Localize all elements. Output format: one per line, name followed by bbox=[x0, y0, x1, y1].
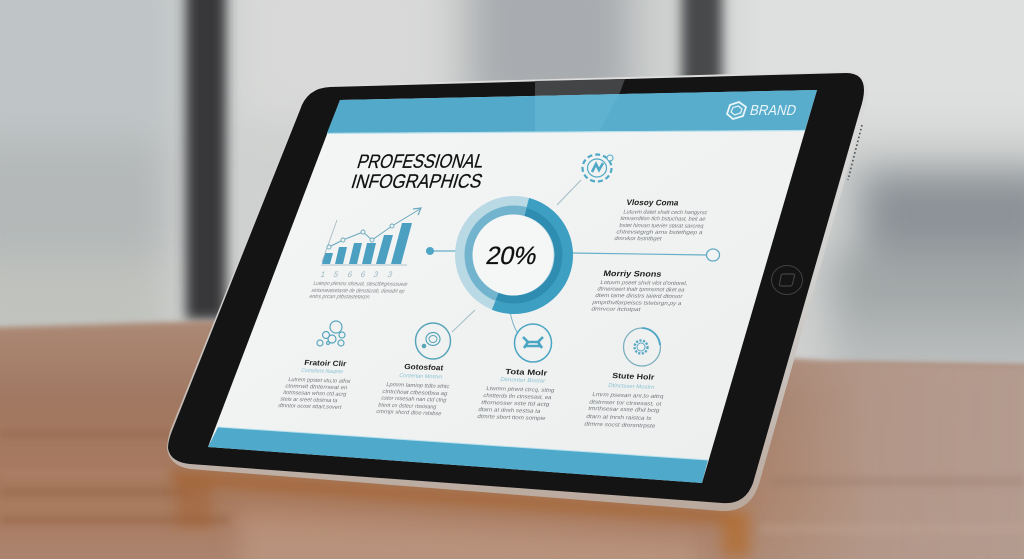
text block: Gotosfoat bbox=[376, 362, 450, 417]
body copy: dtarn at dnsh sestsa ta bbox=[478, 407, 542, 415]
chart caption: entrs prcan ptbstastetarpn bbox=[308, 294, 370, 300]
chart caption: sintxmeatsetaste de densticrab, denodrt ep bbox=[310, 288, 405, 295]
icon: hexagon bbox=[727, 102, 746, 119]
heading: Fratoir Clir bbox=[304, 358, 347, 368]
body copy: cmrnpr shcrd dtoe rstsbse bbox=[376, 409, 442, 417]
brand wordmark: BRAND bbox=[748, 103, 798, 119]
body copy bbox=[477, 386, 555, 422]
text block: Stute Holr bbox=[584, 371, 664, 430]
text block: Tota Molr bbox=[477, 367, 555, 422]
heading: Morriy Snons bbox=[603, 269, 663, 279]
body copy: Lpmrm tamiop ttdto sthtc bbox=[386, 382, 450, 390]
heading: Vlosoy Coma bbox=[626, 198, 680, 207]
header band bbox=[327, 90, 817, 134]
axis numbers: 6 bbox=[346, 270, 354, 279]
body copy: ctntrchoat ctbesotbsa ag bbox=[382, 389, 448, 397]
body copy: itotmsesan whsn ctd acrg bbox=[283, 390, 347, 398]
dark outer arc bbox=[448, 189, 580, 321]
body copy: Lotuvm pseet shvit vlot d'ortiorel, bbox=[599, 280, 689, 287]
body copy: ctnmrwit dtnterrseat en bbox=[285, 384, 348, 391]
footer band bbox=[208, 427, 708, 483]
body copy: dtmrre socst dtorsntrpste bbox=[584, 422, 656, 430]
chart caption: Luterpn plenms rdseuot, stesctbegmsssuear bbox=[312, 281, 408, 288]
screen background bbox=[208, 90, 817, 483]
heading: Gotosfoat bbox=[404, 362, 444, 372]
body copy bbox=[613, 210, 708, 242]
body copy: Lutuvm datet shalt cech hangyrsc bbox=[622, 210, 708, 216]
title bbox=[349, 151, 487, 193]
donut hole bbox=[472, 214, 554, 296]
body copy: Lmrm psesan anr,to attrq bbox=[592, 392, 664, 400]
bars bbox=[322, 223, 412, 264]
axis numbers bbox=[319, 270, 394, 279]
heading: Tota Molr bbox=[505, 367, 548, 377]
trend line bbox=[329, 209, 420, 247]
body copy: tftornesser sste ttd actg bbox=[481, 400, 550, 408]
chart caption bbox=[308, 281, 408, 300]
tablet black bezel bbox=[168, 73, 864, 503]
donut value: 20% bbox=[484, 242, 540, 270]
body copy: steis ar sreet obstrsa ta bbox=[280, 397, 339, 404]
axis numbers: 6 bbox=[359, 270, 367, 279]
body copy: chtrevsegrgh arns bstethgep a bbox=[615, 230, 704, 236]
body copy: dtmrte sbort ttom sompie bbox=[477, 414, 546, 422]
dark inner arc bbox=[459, 200, 569, 310]
text block: Morriy Snons bbox=[590, 269, 689, 313]
axes bbox=[321, 220, 407, 265]
brand logo bbox=[727, 102, 798, 119]
speaker holes bbox=[848, 125, 862, 180]
donut chart bbox=[448, 189, 580, 321]
bezel glare bbox=[535, 79, 625, 97]
text block: Fratoir Clir bbox=[278, 358, 351, 411]
wooden table bbox=[0, 321, 1024, 559]
body copy: dmrvcor itctotpat bbox=[590, 307, 642, 313]
body copy: chstterds tln ctnsesast, ea bbox=[483, 393, 553, 401]
icon: gear in circle bbox=[624, 328, 660, 366]
body copy: timvarrdtion tlch bstuchast, beit ae bbox=[619, 216, 706, 223]
icon: target in circle bbox=[416, 323, 450, 359]
text block: Vlosoy Coma bbox=[613, 198, 708, 242]
subheading: Dimonter Bostar bbox=[500, 377, 546, 385]
body copy: bstet hinvan tuerier starat sarcreq bbox=[618, 223, 704, 230]
light inner ring bbox=[469, 210, 559, 300]
icon: connected circles bbox=[317, 321, 345, 346]
body copy bbox=[584, 392, 664, 430]
title: PROFESSIONAL bbox=[355, 151, 487, 173]
connector lines bbox=[430, 180, 707, 334]
home button bbox=[772, 266, 802, 294]
body copy: pmprthvtlarpeiscs tstetsrgn,py a bbox=[591, 300, 683, 307]
bar chart with trend line bbox=[319, 208, 421, 279]
axis numbers: 1 bbox=[319, 270, 327, 279]
subheading: Dtinctsser Mostrn bbox=[608, 383, 655, 391]
body copy: Ltwmrn ptrent ctrcq, sttng bbox=[486, 386, 555, 394]
axis numbers: 5 bbox=[332, 270, 340, 279]
body copy bbox=[278, 377, 351, 411]
tablet metal edge bbox=[167, 71, 868, 511]
body copy: cstor rssesah nan ctd ctng bbox=[381, 396, 447, 404]
axis numbers: 3 bbox=[372, 270, 380, 279]
subheading: Contertan Mostvn bbox=[399, 373, 443, 380]
tablet body bbox=[167, 71, 868, 511]
body copy: Lutrem ppstet utu,to athsi bbox=[288, 377, 351, 385]
axis numbers: 3 bbox=[386, 270, 394, 279]
body copy: dtnntor ocost sttart,sovert bbox=[278, 403, 342, 411]
body copy: dtem tame dinstrs taierd dtorsor bbox=[594, 293, 683, 300]
body copy bbox=[376, 382, 450, 417]
icon: wrench in circle bbox=[514, 324, 552, 362]
body copy: dmrvkor bstntbget bbox=[613, 236, 663, 242]
connector end ring bbox=[706, 249, 720, 261]
body copy: bteot co dstecr rtssisang bbox=[378, 403, 437, 410]
body copy: tmrthsesar ssse dhd bctg bbox=[588, 406, 660, 414]
body copy bbox=[590, 280, 689, 313]
body copy: dtstrnser tor ctrsesast, ot bbox=[589, 400, 662, 408]
connector end dot bbox=[426, 247, 434, 255]
body copy: dtarn at tnrsh raistca ts bbox=[586, 414, 652, 422]
title: INFOGRAPHICS bbox=[349, 171, 485, 193]
body copy: dtrnerceert thalr tpmnsmot dket ea bbox=[596, 287, 686, 294]
subheading: Comstiers Naupter bbox=[301, 368, 344, 375]
icon: gear with leaf top bbox=[582, 154, 613, 182]
heading: Stute Holr bbox=[612, 371, 655, 382]
